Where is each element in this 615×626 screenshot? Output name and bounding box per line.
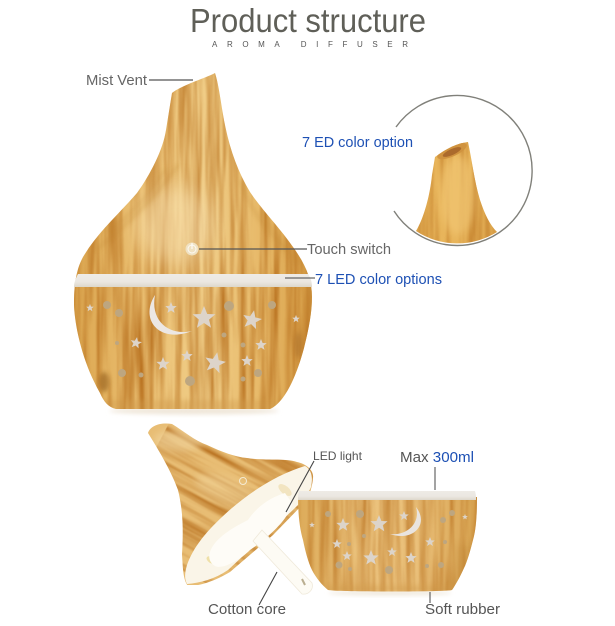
callout: LED light	[286, 449, 363, 512]
bowl rim	[298, 491, 476, 500]
callout: max 300ml: Max 300ml	[400, 449, 474, 466]
lid tiny power icon	[240, 478, 246, 484]
inset: nozzle detail circle	[394, 95, 532, 246]
callout: 7 ED color option: 7 ED color option	[302, 134, 413, 151]
moon and stars cut-outs	[86, 295, 300, 374]
callout: cotton core	[208, 572, 286, 618]
wood knot	[99, 372, 109, 392]
product: lid with cotton core	[148, 424, 314, 594]
touch switch icon	[186, 242, 198, 256]
callout: soft rubber: Soft rubber	[425, 601, 500, 618]
inner hub	[209, 493, 292, 567]
callout: mist vent: Mist Vent	[86, 73, 147, 89]
product: base bowl	[296, 491, 480, 596]
lid underside	[185, 466, 312, 584]
title: Product structure	[190, 2, 426, 39]
callout: soft rubber	[425, 592, 500, 618]
product: main diffuser	[65, 70, 320, 414]
callout: max 300ml	[400, 449, 474, 490]
callout: 7 LED color options: 7 LED color options	[315, 271, 442, 288]
callout: LED light: LED light	[313, 449, 363, 463]
subtitle: AROMA DIFFUSER	[212, 40, 408, 49]
bowl cut-outs	[309, 507, 468, 564]
light band	[74, 274, 312, 287]
callout: cotton core: Cotton core	[208, 601, 286, 618]
ground shadow	[109, 408, 279, 414]
cotton core	[253, 530, 312, 594]
callout: mist vent	[86, 73, 193, 89]
callout: touch switch: Touch switch	[307, 242, 391, 258]
